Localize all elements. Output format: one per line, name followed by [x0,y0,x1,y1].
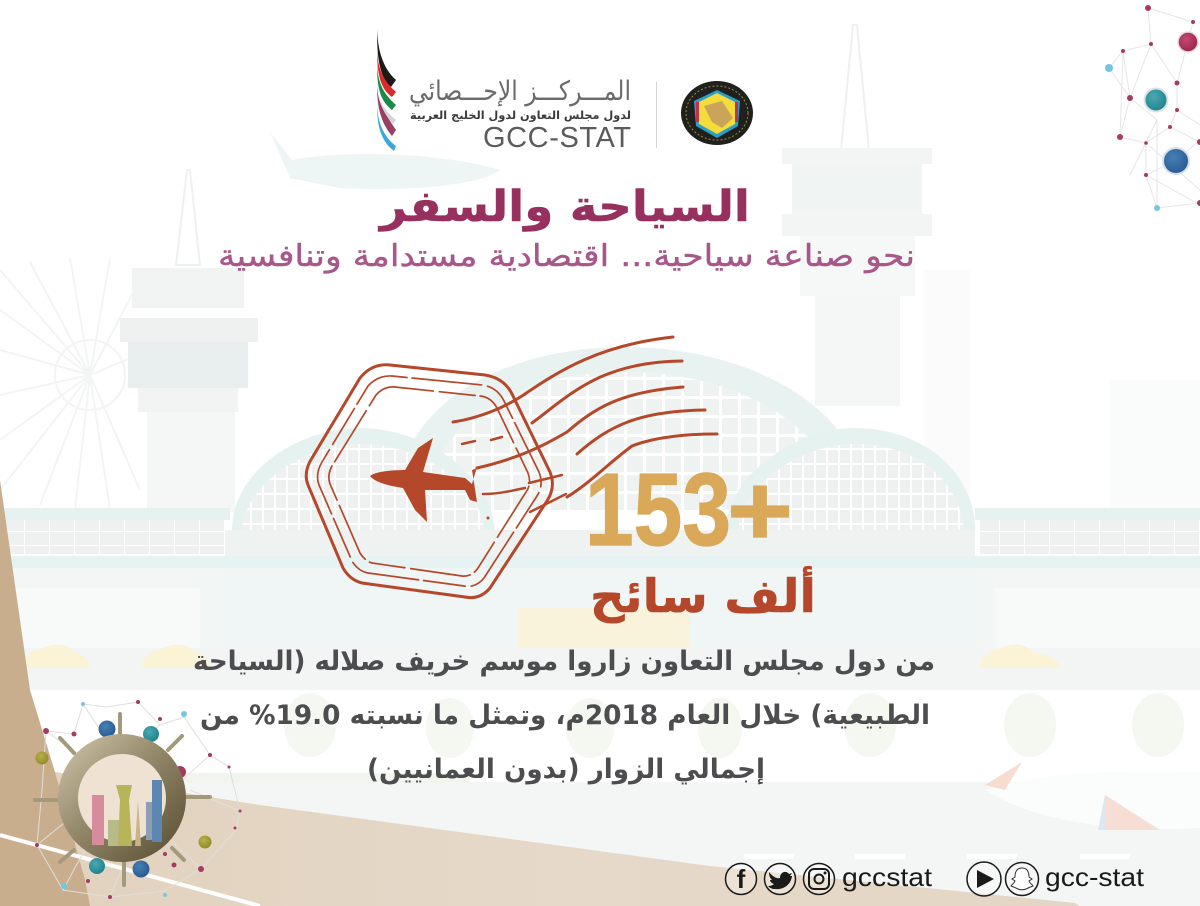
body text: إجمالي الزوار (بدون العمانيين) [367,754,765,785]
social: twitter icon [764,864,796,894]
ship wheel emblem with network [35,700,242,899]
network decoration top right [1105,5,1200,211]
social: snapchat icon [1006,862,1038,896]
subtitle: نحو صناعة سياحية... اقتصادية مستدامة وتنافسية [218,239,915,274]
handle: gcc-stat: gcc-stat [1045,862,1145,892]
handle: gccstat: gccstat [842,862,933,892]
logo: Arabic name [409,76,631,154]
logo: Arabic name: لدول مجلس التعاون لدول الخليج العربية [410,108,631,123]
GCC emblem [681,81,753,145]
stamp: plane silhouette [370,438,487,522]
big number: 153 [585,452,731,567]
wheel: ring [68,744,176,852]
bottom tan shapes [0,480,1080,906]
body text: من دول مجلس التعاون زاروا موسم خريف صلاله (السياحة [193,646,935,677]
number unit label: ألف سائح [590,566,816,623]
logo: GCC-STAT ribbon [377,29,396,151]
stamp: inner rings [318,376,541,586]
title: السياحة والسفر [378,182,750,232]
logo: Arabic name: GCC-STAT [483,122,631,154]
stamp: outer hexagon [306,365,552,598]
social: facebook icon: f [737,864,746,894]
social: facebook icon [726,864,756,894]
body text: الطبيعية) خلال العام 2018م، وتمثل ما نسبته 19.0% من [200,700,930,731]
wheel: skyline [92,780,162,846]
stamp icon with plane [306,337,717,598]
stamp: postmark waves [453,337,673,422]
big number: + [727,455,793,567]
social: youtube icon [967,862,1001,896]
body text [193,646,935,785]
logo divider [656,82,657,148]
social: instagram icon [804,864,834,894]
logo: Arabic name: المـــركـــز الإحـــصائي [409,76,631,107]
wheel: handles [35,714,210,885]
